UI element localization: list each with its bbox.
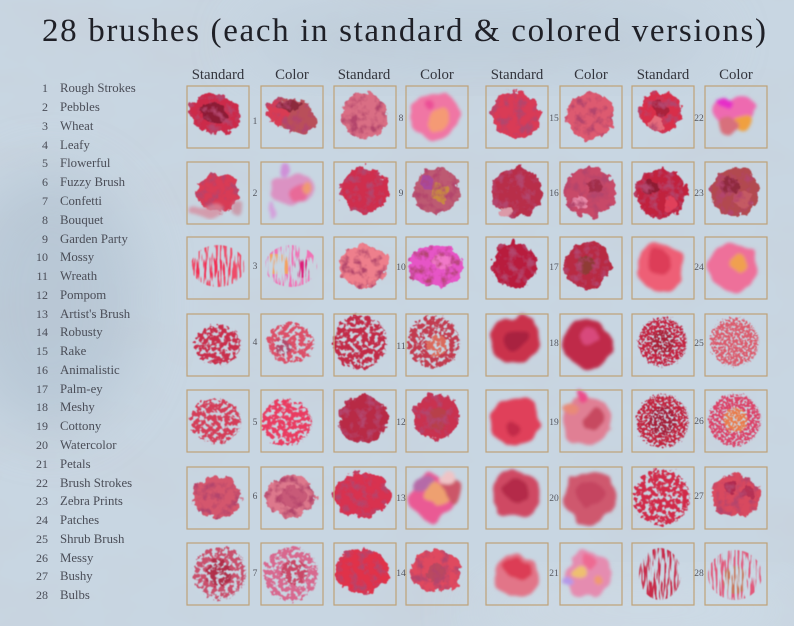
numbered brush list: 11 bbox=[36, 269, 48, 283]
frames and number labels grid: 19 bbox=[549, 418, 559, 428]
brush 8 color bbox=[411, 92, 459, 140]
frames and number labels grid: 24 bbox=[694, 263, 704, 273]
numbered brush list: 19 bbox=[36, 419, 48, 433]
frames and number labels grid: 26 bbox=[694, 417, 704, 427]
brush 19 color bbox=[563, 392, 611, 445]
brush 26 standard bbox=[637, 395, 689, 447]
frames and number labels grid: 4 bbox=[253, 338, 258, 348]
frames and number labels grid: 16 bbox=[549, 189, 559, 199]
numbered brush list: Bushy bbox=[60, 569, 93, 583]
brush 5 standard bbox=[191, 399, 241, 443]
numbered brush list: 23 bbox=[36, 494, 48, 508]
frames and number labels grid: 9 bbox=[399, 189, 404, 199]
frames and number labels grid: 3 bbox=[253, 262, 258, 272]
frames and number labels grid bbox=[187, 86, 767, 605]
brush 20 standard bbox=[492, 470, 540, 518]
numbered brush list: 4 bbox=[42, 138, 48, 152]
brush 17 standard bbox=[491, 242, 537, 288]
brush 17 color bbox=[564, 242, 610, 288]
column headings: Color bbox=[275, 67, 309, 83]
brush 20 color bbox=[563, 471, 615, 523]
brush 4 standard bbox=[195, 325, 241, 365]
brush 27 standard bbox=[634, 469, 690, 525]
column headings: Standard bbox=[491, 67, 544, 83]
brush 16 color bbox=[565, 167, 615, 217]
numbered brush list: Leafy bbox=[60, 138, 90, 152]
brush 3 color bbox=[265, 245, 317, 287]
brush 26 color bbox=[709, 394, 761, 446]
frames and number labels grid: 20 bbox=[549, 494, 559, 504]
brush 21 standard bbox=[495, 554, 539, 596]
frames and number labels grid: 25 bbox=[694, 339, 704, 349]
brush 11 color bbox=[408, 316, 460, 368]
frames and number labels grid: 17 bbox=[549, 263, 559, 273]
frames and number labels grid: 11 bbox=[396, 342, 406, 352]
frames and number labels grid: 12 bbox=[396, 418, 406, 428]
brush 18 standard bbox=[491, 316, 539, 364]
numbered brush list: Wreath bbox=[60, 269, 98, 283]
numbered brush list: 7 bbox=[42, 194, 48, 208]
numbered brush list: Bouquet bbox=[60, 213, 104, 227]
brush 18 color bbox=[563, 319, 611, 367]
brush 22 color bbox=[714, 96, 756, 132]
numbered brush list: 14 bbox=[36, 325, 48, 339]
brush 16 standard bbox=[492, 167, 542, 217]
column headings: Standard bbox=[637, 67, 690, 83]
frames and number labels grid: 1 bbox=[253, 117, 258, 127]
brush 15 color bbox=[566, 92, 614, 140]
numbered brush list: 2 bbox=[42, 100, 48, 114]
numbered brush list: Pebbles bbox=[60, 100, 100, 114]
frames and number labels grid: 28 bbox=[694, 569, 704, 579]
numbered brush list: 24 bbox=[36, 513, 48, 527]
numbered brush list: Rough Strokes bbox=[60, 81, 136, 95]
frames and number labels grid: 21 bbox=[549, 569, 559, 579]
brush 12 standard bbox=[339, 395, 387, 443]
brush 22 standard bbox=[640, 92, 682, 132]
numbered brush list: Fuzzy Brush bbox=[60, 175, 126, 189]
numbered brush list: Cottony bbox=[60, 419, 102, 433]
numbered brush list: 28 bbox=[36, 588, 48, 602]
numbered brush list: 26 bbox=[36, 551, 48, 565]
brush 25 color bbox=[711, 318, 759, 366]
brush 6 standard bbox=[193, 476, 241, 518]
brush 1 color bbox=[265, 91, 323, 141]
brush 10 color bbox=[408, 245, 462, 287]
numbered brush list: Confetti bbox=[60, 194, 102, 208]
brush 24 standard bbox=[637, 244, 685, 292]
numbered brush list: 6 bbox=[42, 175, 48, 189]
numbered brush list: Brush Strokes bbox=[60, 476, 132, 490]
numbered brush list: Watercolor bbox=[60, 438, 117, 452]
brush 5 color bbox=[262, 399, 312, 445]
brush 7 standard bbox=[194, 547, 246, 599]
numbered brush list: 8 bbox=[42, 213, 48, 227]
numbered brush list: 12 bbox=[36, 288, 48, 302]
numbered brush list: 1 bbox=[42, 81, 48, 95]
column headings: Standard bbox=[192, 67, 245, 83]
brush 15 standard bbox=[492, 91, 540, 139]
numbered brush list: Robusty bbox=[60, 325, 103, 339]
frames and number labels grid: 15 bbox=[549, 114, 559, 124]
frames and number labels grid: 23 bbox=[694, 189, 704, 199]
brush 4 color bbox=[268, 323, 314, 363]
numbered brush list: 15 bbox=[36, 344, 48, 358]
numbered brush list: Rake bbox=[60, 344, 87, 358]
frames and number labels grid: 6 bbox=[253, 492, 258, 502]
brush 13 standard bbox=[333, 473, 391, 517]
brush 28 standard bbox=[639, 548, 681, 600]
numbered brush list: Animalistic bbox=[60, 363, 120, 377]
numbered brush list: Zebra Prints bbox=[60, 494, 123, 508]
column headings: Standard bbox=[338, 67, 391, 83]
numbered brush list: Mossy bbox=[60, 250, 95, 264]
brush 11 standard bbox=[333, 315, 387, 369]
numbered brush list: Meshy bbox=[60, 400, 95, 414]
frames and number labels grid: 7 bbox=[253, 569, 258, 579]
brush 14 standard bbox=[334, 549, 388, 593]
frames and number labels grid: 22 bbox=[694, 114, 704, 124]
brush 14 color bbox=[410, 550, 462, 592]
brush 10 standard bbox=[338, 245, 388, 287]
brush 8 standard bbox=[341, 92, 387, 138]
numbered brush list: Petals bbox=[60, 457, 91, 471]
numbered brush list: 21 bbox=[36, 457, 48, 471]
brush 2 standard bbox=[189, 174, 245, 217]
column headings bbox=[192, 67, 753, 83]
numbered brush list: 20 bbox=[36, 438, 48, 452]
brush 1 standard bbox=[185, 89, 245, 139]
brush 19 standard bbox=[490, 397, 538, 445]
column headings: Color bbox=[719, 67, 753, 83]
numbered brush list: 25 bbox=[36, 532, 48, 546]
frames and number labels grid: 14 bbox=[396, 569, 406, 579]
numbered brush list: Patches bbox=[60, 513, 99, 527]
numbered brush list: 27 bbox=[36, 569, 48, 583]
numbered brush list: Flowerful bbox=[60, 156, 111, 170]
brush 7 color bbox=[264, 547, 318, 601]
brush 25 standard bbox=[639, 318, 687, 366]
numbered brush list: Bulbs bbox=[60, 588, 90, 602]
frames and number labels grid: 5 bbox=[253, 418, 258, 428]
brush 13 color bbox=[410, 473, 461, 520]
numbered brush list: 22 bbox=[36, 476, 48, 490]
brush 21 color bbox=[563, 552, 611, 598]
frames and number labels grid: 18 bbox=[549, 339, 559, 349]
numbered brush list: 5 bbox=[42, 156, 48, 170]
brush 3 standard bbox=[191, 245, 245, 287]
brush 9 standard bbox=[341, 167, 387, 213]
frames and number labels grid: 27 bbox=[694, 492, 704, 502]
numbered brush list: 17 bbox=[36, 382, 48, 396]
frames and number labels grid: 10 bbox=[396, 263, 406, 273]
numbered brush list: Pompom bbox=[60, 288, 106, 302]
numbered brush list: 18 bbox=[36, 400, 48, 414]
column headings: Color bbox=[420, 67, 454, 83]
brush 28 color bbox=[708, 550, 762, 600]
brush 23 color bbox=[711, 168, 759, 216]
brush 12 color bbox=[413, 394, 459, 440]
frames and number labels grid: 13 bbox=[396, 494, 406, 504]
brush 27 color bbox=[711, 474, 761, 516]
numbered brush list: 9 bbox=[42, 232, 48, 246]
numbered brush list: 3 bbox=[42, 119, 48, 133]
brush 6 color bbox=[266, 476, 316, 518]
numbered brush list: Artist's Brush bbox=[60, 307, 131, 321]
frames and number labels grid: 2 bbox=[253, 189, 258, 199]
numbered brush list: 13 bbox=[36, 307, 48, 321]
brush 23 standard bbox=[636, 168, 686, 218]
numbered brush list: 16 bbox=[36, 363, 48, 377]
brush 2 color bbox=[268, 163, 316, 218]
brush 9 color bbox=[414, 168, 460, 214]
brush 24 color bbox=[709, 243, 757, 291]
numbered brush list: Messy bbox=[60, 551, 94, 565]
title: 28 brushes (each in standard & colored versions) bbox=[42, 13, 766, 49]
frames and number labels grid: 8 bbox=[399, 114, 404, 124]
numbered brush list: Wheat bbox=[60, 119, 94, 133]
numbered brush list bbox=[36, 81, 136, 602]
numbered brush list: Shrub Brush bbox=[60, 532, 125, 546]
numbered brush list: Garden Party bbox=[60, 232, 128, 246]
numbered brush list: Palm-ey bbox=[60, 382, 103, 396]
column headings: Color bbox=[574, 67, 608, 83]
numbered brush list: 10 bbox=[36, 250, 48, 264]
